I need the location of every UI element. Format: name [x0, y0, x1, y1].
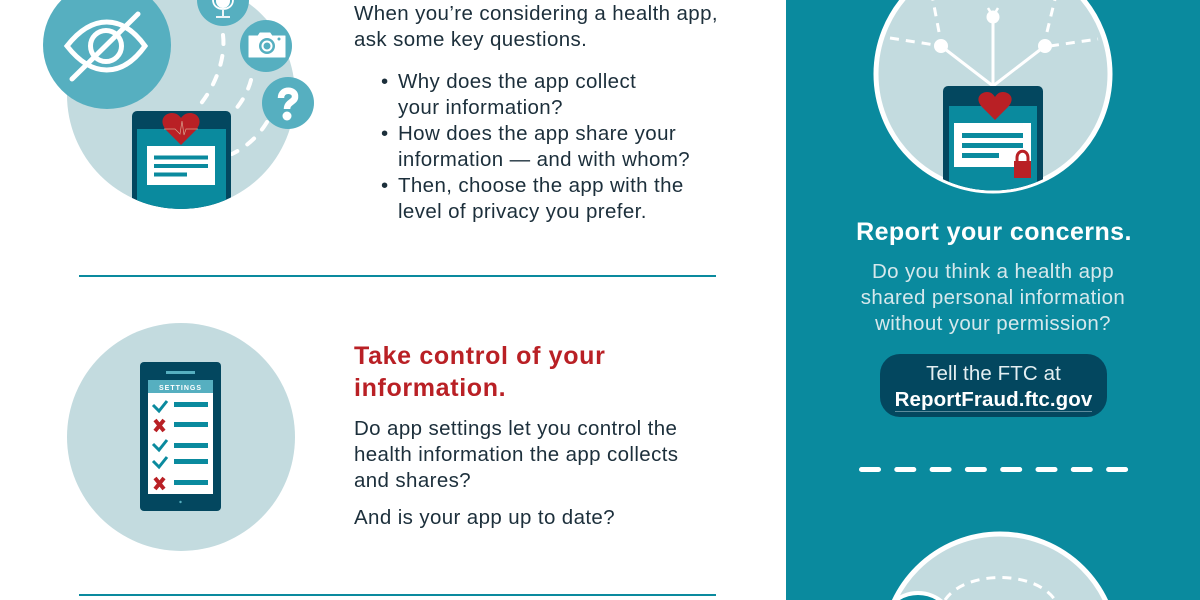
text: up to date: And is your app up to date? [354, 506, 615, 529]
text: shared personal information: Do you think a health app [872, 260, 1114, 283]
heading: report your concerns: Report your concerns. [856, 218, 1132, 246]
text: shared personal information: without your permission? [875, 312, 1111, 335]
dashed arc [945, 578, 1055, 600]
text: shared personal information [861, 260, 1125, 335]
illustration: settings phone [67, 323, 295, 551]
illustration: next section circle [892, 532, 1108, 600]
link text [895, 362, 1092, 412]
bullet list: questions: Then, choose the app with the [398, 174, 684, 197]
text: key questions intro: When you’re considering a health app, [354, 2, 718, 25]
circle [883, 534, 1117, 600]
bullet list: questions: information — and with whom? [398, 148, 690, 171]
bullet list: questions [381, 70, 690, 223]
background circle [67, 323, 295, 551]
icon: tablet with heart and lock [943, 86, 1043, 190]
dashed connector paths [199, 35, 267, 154]
data network lines [890, 0, 1098, 86]
text: app settings: Do app settings let you control the [354, 417, 677, 440]
phone body: SETTINGS [159, 385, 202, 392]
dashed divider [859, 467, 1128, 472]
illustration: locked health data [874, 0, 1112, 194]
illustration: app privacy icons [43, 0, 314, 209]
divider [79, 594, 716, 596]
text: app settings [354, 417, 678, 492]
text: app settings: health information the app collects [354, 443, 678, 466]
bullet list: questions: Why does the app collect [398, 70, 636, 93]
text: shared personal information: shared personal information [861, 286, 1125, 309]
bullet list: questions: • [381, 174, 389, 197]
heading: take control [354, 342, 605, 402]
bullet list: questions: level of privacy you prefer. [398, 200, 647, 223]
icon: crossed-out eye [43, 0, 171, 109]
background circle [67, 0, 295, 209]
link text: Tell the FTC at [926, 362, 1061, 385]
text: app settings: and shares? [354, 469, 471, 492]
background circle [876, 0, 1110, 191]
bullet list: questions: • [381, 70, 389, 93]
icon: tablet with heart [132, 111, 231, 209]
bullet list: questions: How does the app share your [398, 122, 676, 145]
divider [79, 275, 716, 277]
heading: take control: information. [354, 374, 506, 402]
icon: microphone [197, 0, 249, 26]
bullet list: questions: • [381, 122, 389, 145]
icon: camera [240, 20, 292, 72]
bullet list: questions: your information? [398, 96, 563, 119]
text: key questions intro: ask some key questions. [354, 28, 587, 51]
icon: question mark [262, 77, 314, 129]
text: key questions intro [354, 2, 718, 51]
small bubble [881, 593, 955, 600]
callout: tell the FTC [880, 354, 1107, 417]
phone body [140, 362, 221, 511]
heading: take control: Take control of your [354, 342, 605, 370]
link text: ReportFraud.ftc.gov [895, 388, 1092, 411]
panel: report concerns [786, 0, 1200, 600]
